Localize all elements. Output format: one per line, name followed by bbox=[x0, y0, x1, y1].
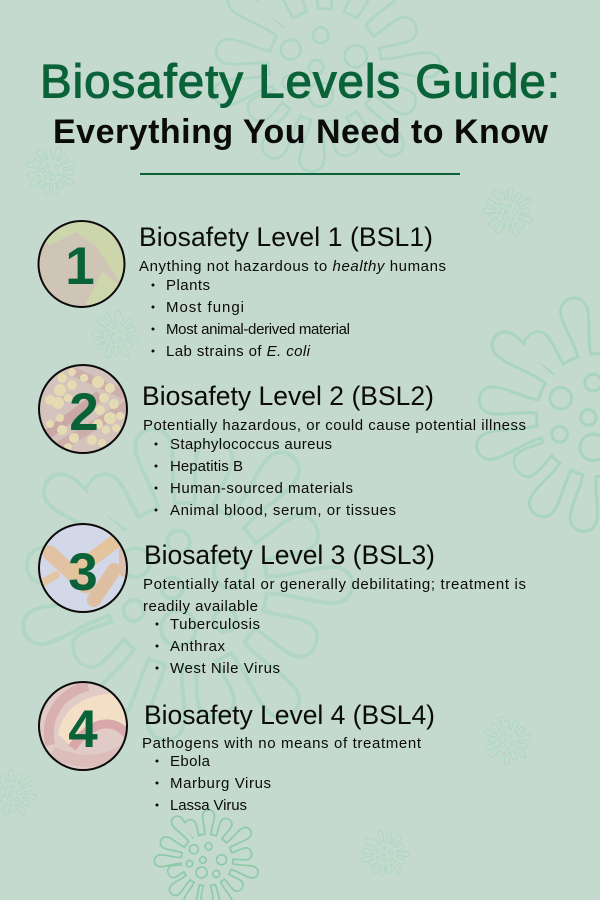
badge: number 1 over plant cell photo bbox=[38, 220, 126, 310]
description: Potentially fatal or generally debilitating; treatment is bbox=[143, 576, 526, 593]
heading: Biosafety Level 3 (BSL3) bbox=[144, 540, 435, 570]
bullet list: Most fungi bbox=[166, 299, 244, 316]
panel: BSL3: readily available bbox=[143, 598, 258, 615]
badge: number 3 over rod bacteria photo bbox=[38, 523, 128, 613]
bullet list: Animal blood, serum, or tissues bbox=[170, 502, 396, 519]
heading: Biosafety Level 4 (BSL4) bbox=[144, 700, 435, 730]
bullet list: Staphylococcus aureus bbox=[170, 436, 332, 453]
panel: BSL3 bbox=[38, 523, 526, 677]
badge: number 4 over virus photo: 4 bbox=[68, 700, 98, 759]
bullet list bbox=[152, 277, 350, 360]
badge: number 4 over virus photo bbox=[38, 681, 128, 771]
badge: number 2 over bacteria photo bbox=[38, 364, 128, 454]
badge: number 1 over plant cell photo: 1 bbox=[65, 237, 95, 296]
panel: BSL2 bbox=[38, 364, 526, 519]
bullet list: Ebola bbox=[170, 753, 211, 770]
bullet list bbox=[154, 436, 396, 519]
description: Potentially hazardous, or could cause potential illness bbox=[143, 417, 526, 434]
subtitle: Everything You Need to Know bbox=[53, 113, 549, 151]
title: Biosafety Levels Guide: bbox=[40, 56, 560, 108]
bullet list: Lab strains of E. coli bbox=[166, 343, 311, 360]
bullet list bbox=[156, 616, 280, 677]
panel: BSL1 bbox=[38, 220, 446, 360]
badge: number 3 over rod bacteria photo: 3 bbox=[68, 543, 98, 602]
description: Anything not hazardous to healthy humans bbox=[139, 258, 446, 275]
bullet list bbox=[156, 753, 271, 814]
bullet list: Marburg Virus bbox=[170, 775, 271, 792]
description: Pathogens with no means of treatment bbox=[142, 735, 422, 752]
heading: Biosafety Level 2 (BSL2) bbox=[142, 381, 434, 411]
panel: BSL4 bbox=[38, 681, 435, 814]
bullet list: Most animal-derived material bbox=[166, 321, 350, 338]
bullet list: Lassa Virus bbox=[170, 797, 247, 814]
bullet list: Hepatitis B bbox=[170, 458, 243, 475]
bullet list: Anthrax bbox=[170, 638, 226, 655]
bullet list: Plants bbox=[166, 277, 210, 294]
heading: Biosafety Level 1 (BSL1) bbox=[139, 222, 433, 252]
badge: number 2 over bacteria photo: 2 bbox=[69, 383, 99, 442]
bullet list: West Nile Virus bbox=[170, 660, 280, 677]
bullet list: Tuberculosis bbox=[170, 616, 260, 633]
bullet list: Human-sourced materials bbox=[170, 480, 353, 497]
